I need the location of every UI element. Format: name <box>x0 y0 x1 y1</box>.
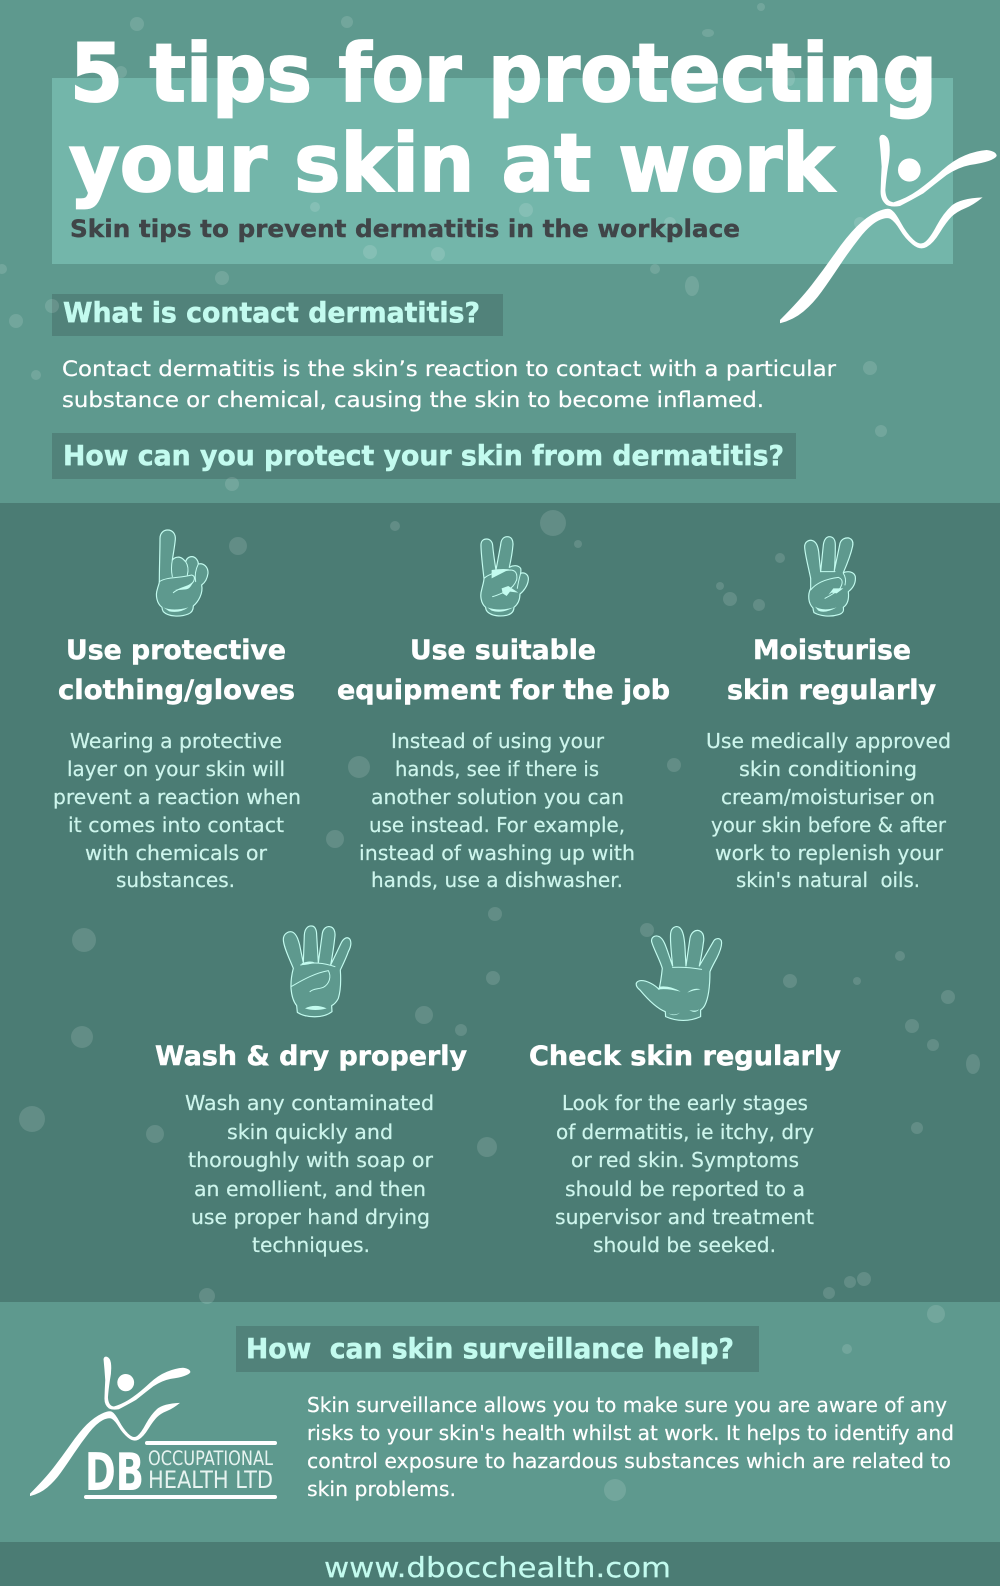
skin surveillance paragraph: skin problems. <box>307 1477 456 1501</box>
logo: DB Occupational Health Ltd: OCCUPATIONAL <box>148 1447 273 1470</box>
tip 2 heading <box>337 635 670 706</box>
logo: DB Occupational Health Ltd: DB <box>85 1443 144 1503</box>
tip 5 text: Look for the early stages <box>562 1091 808 1115</box>
tip 5 heading: Check skin regularly <box>529 1041 841 1072</box>
tip 1 heading <box>58 635 295 706</box>
tip 4 text: an emollient, and then <box>194 1177 426 1201</box>
tip 3 text: your skin before & after <box>711 813 947 837</box>
tip 2 text: another solution you can <box>371 785 624 809</box>
title <box>69 27 937 210</box>
tip 3 heading: Moisturise <box>753 635 911 666</box>
icon: open hand <box>636 927 722 1020</box>
tip 1 heading: clothing/gloves <box>58 675 295 706</box>
tip 4 text <box>185 1091 434 1257</box>
tip 3 text: Use medically approved <box>706 729 951 753</box>
tip 1 text <box>53 729 301 892</box>
tip 1 text: with chemicals or <box>85 841 268 865</box>
intro paragraph: Contact dermatitis is the skin’s reaction to contact with a particular <box>62 357 836 382</box>
tip 3 text: cream/moisturiser on <box>721 785 935 809</box>
tip 3 text: work to replenish your <box>715 841 944 865</box>
tips section panel <box>0 503 1000 1302</box>
intro paragraph: substance or chemical, causing the skin to become inflamed. <box>62 388 764 413</box>
tip 4 text: Wash any contaminated <box>185 1091 434 1115</box>
skin surveillance paragraph: risks to your skin's health whilst at work. It helps to identify and <box>307 1421 954 1445</box>
tip 1 text: layer on your skin will <box>67 757 285 781</box>
tip 2 text: hands, use a dishwasher. <box>371 868 623 892</box>
skin surveillance paragraph: control exposure to hazardous substances which are related to <box>307 1449 951 1473</box>
heading: what is contact dermatitis: What is contact dermatitis? <box>63 296 480 329</box>
tip 1 text: it comes into contact <box>68 813 284 837</box>
logo: DB Occupational Health Ltd: HEALTH LTD <box>148 1466 273 1494</box>
tip 2 text: Instead of using your <box>391 729 605 753</box>
icon: two fingers hand <box>481 537 528 616</box>
tip 3 heading <box>727 635 936 706</box>
tip 2 text: hands, see if there is <box>395 757 599 781</box>
tip 1 text: prevent a reaction when <box>53 785 301 809</box>
heading bar: what is contact dermatitis <box>52 294 503 336</box>
tip 5 text: should be seeked. <box>593 1233 776 1257</box>
logo figure: header <box>780 135 997 323</box>
tip 4 text: skin quickly and <box>227 1120 393 1144</box>
tip 4 text: techniques. <box>252 1233 370 1257</box>
tip 4 heading: Wash & dry properly <box>155 1041 467 1072</box>
title: 5 tips for protecting <box>70 27 937 120</box>
skin surveillance paragraph <box>307 1393 954 1501</box>
tip 3 text <box>706 729 951 892</box>
tip 5 text: of dermatitis, ie itchy, dry <box>556 1120 814 1144</box>
title: your skin at work <box>69 117 836 210</box>
tip 4 text: use proper hand drying <box>191 1205 430 1229</box>
subtitle: Skin tips to prevent dermatitis in the workplace <box>70 215 740 243</box>
tip 3 heading: skin regularly <box>727 675 936 706</box>
tip 2 text: instead of washing up with <box>359 841 635 865</box>
tip 1 text: substances. <box>116 868 235 892</box>
tip 2 text <box>359 729 635 892</box>
tip 4 text: thoroughly with soap or <box>188 1148 434 1172</box>
tip 1 heading: Use protective <box>66 635 286 666</box>
logo: DB Occupational Health Ltd <box>30 1357 277 1503</box>
icon: four fingers hand <box>283 926 351 1017</box>
icon: three fingers hand <box>805 537 855 616</box>
heading: how can you protect: How can you protect your skin from dermatitis? <box>63 439 784 472</box>
footer band <box>0 1542 1000 1586</box>
skin surveillance paragraph: Skin surveillance allows you to make sure you are aware of any <box>307 1393 947 1417</box>
tip 2 text: use instead. For example, <box>369 813 625 837</box>
heading bar: how can you protect <box>52 433 796 479</box>
intro paragraph <box>62 357 836 413</box>
tip 5 text: or red skin. Symptoms <box>571 1148 799 1172</box>
website url: www.dbocchealth.com <box>324 1551 671 1584</box>
tip 3 text: skin conditioning <box>739 757 917 781</box>
tip 1 text: Wearing a protective <box>70 729 282 753</box>
tip 5 text: supervisor and treatment <box>555 1205 814 1229</box>
heading: skin surveillance: How can skin surveillance help? <box>246 1332 734 1365</box>
tip 3 text: skin's natural oils. <box>736 868 920 892</box>
tip 2 heading: equipment for the job <box>337 675 670 706</box>
heading bar: skin surveillance <box>236 1326 759 1372</box>
tip 5 text <box>555 1091 814 1257</box>
tip 5 text: should be reported to a <box>565 1177 805 1201</box>
tip 2 heading: Use suitable <box>410 635 596 666</box>
title panel <box>52 78 953 264</box>
icon: one finger hand <box>156 530 208 616</box>
